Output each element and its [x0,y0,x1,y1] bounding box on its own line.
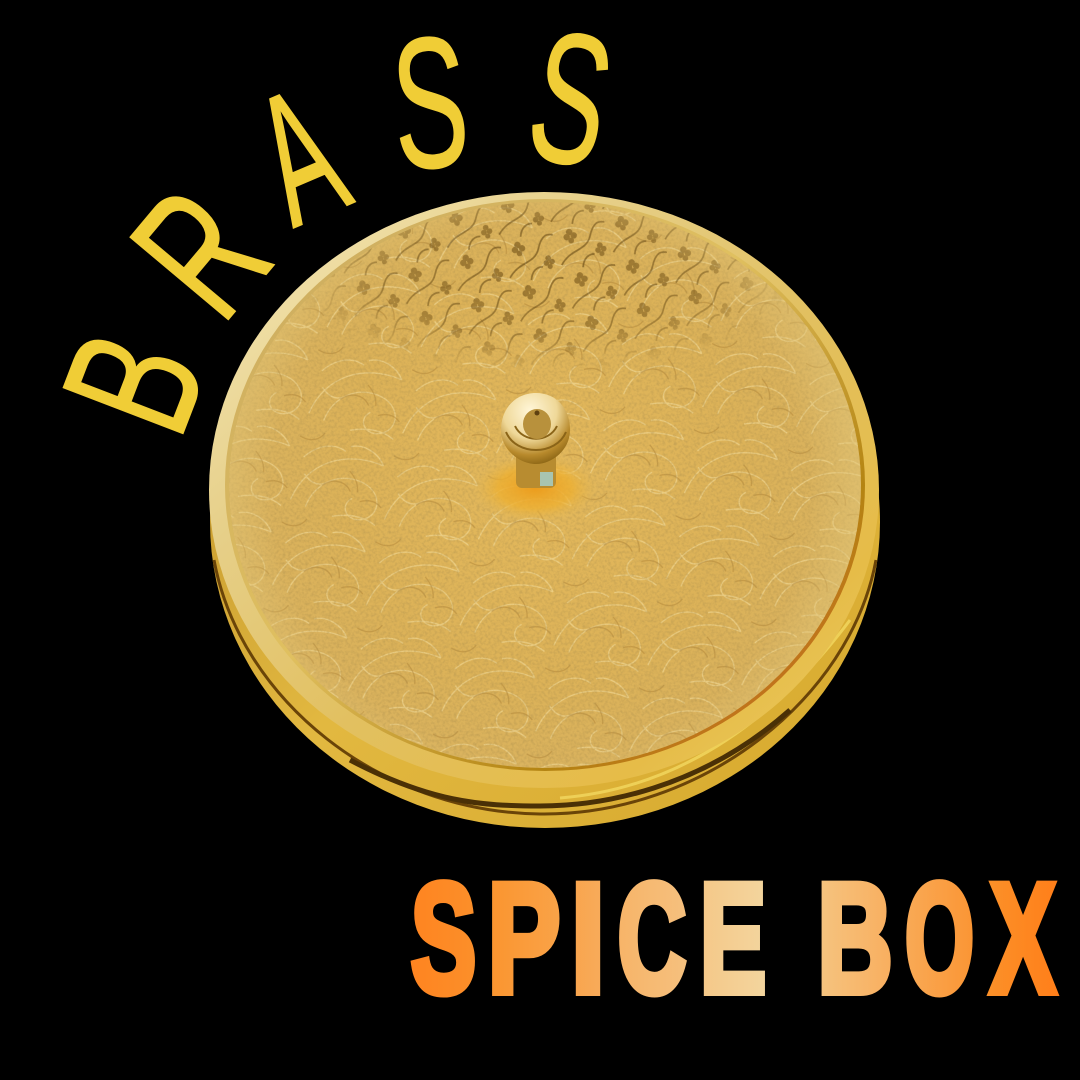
title: SPICE BOX: B [817,852,893,1026]
knob rings [506,426,566,450]
title: SPICE BOX: P [488,851,560,1026]
body bands [214,560,876,814]
engraved lid surface [229,202,861,768]
knob stem [516,452,556,488]
title: SPICE BOX: X [990,851,1056,1026]
letter B: B [23,308,246,457]
box body below the lid [210,216,880,828]
knob finial [523,409,551,439]
title: SPICE BOX: O [905,851,974,1025]
title: SPICE BOX: E [700,850,766,1025]
title: SPICE BOX: I [571,851,605,1025]
letter A: A [227,46,371,265]
knob base [473,454,597,522]
brass spice box [209,190,880,828]
title: BRASS arched [23,0,627,457]
lid rim [209,192,879,788]
title: SPICE BOX [411,850,1056,1026]
engraving texture [225,190,865,770]
title: SPICE BOX: S [411,851,476,1026]
letter R: R [94,153,309,353]
letter S: S [386,0,474,209]
knob ball [501,393,570,464]
title: SPICE BOX: C [618,852,686,1026]
